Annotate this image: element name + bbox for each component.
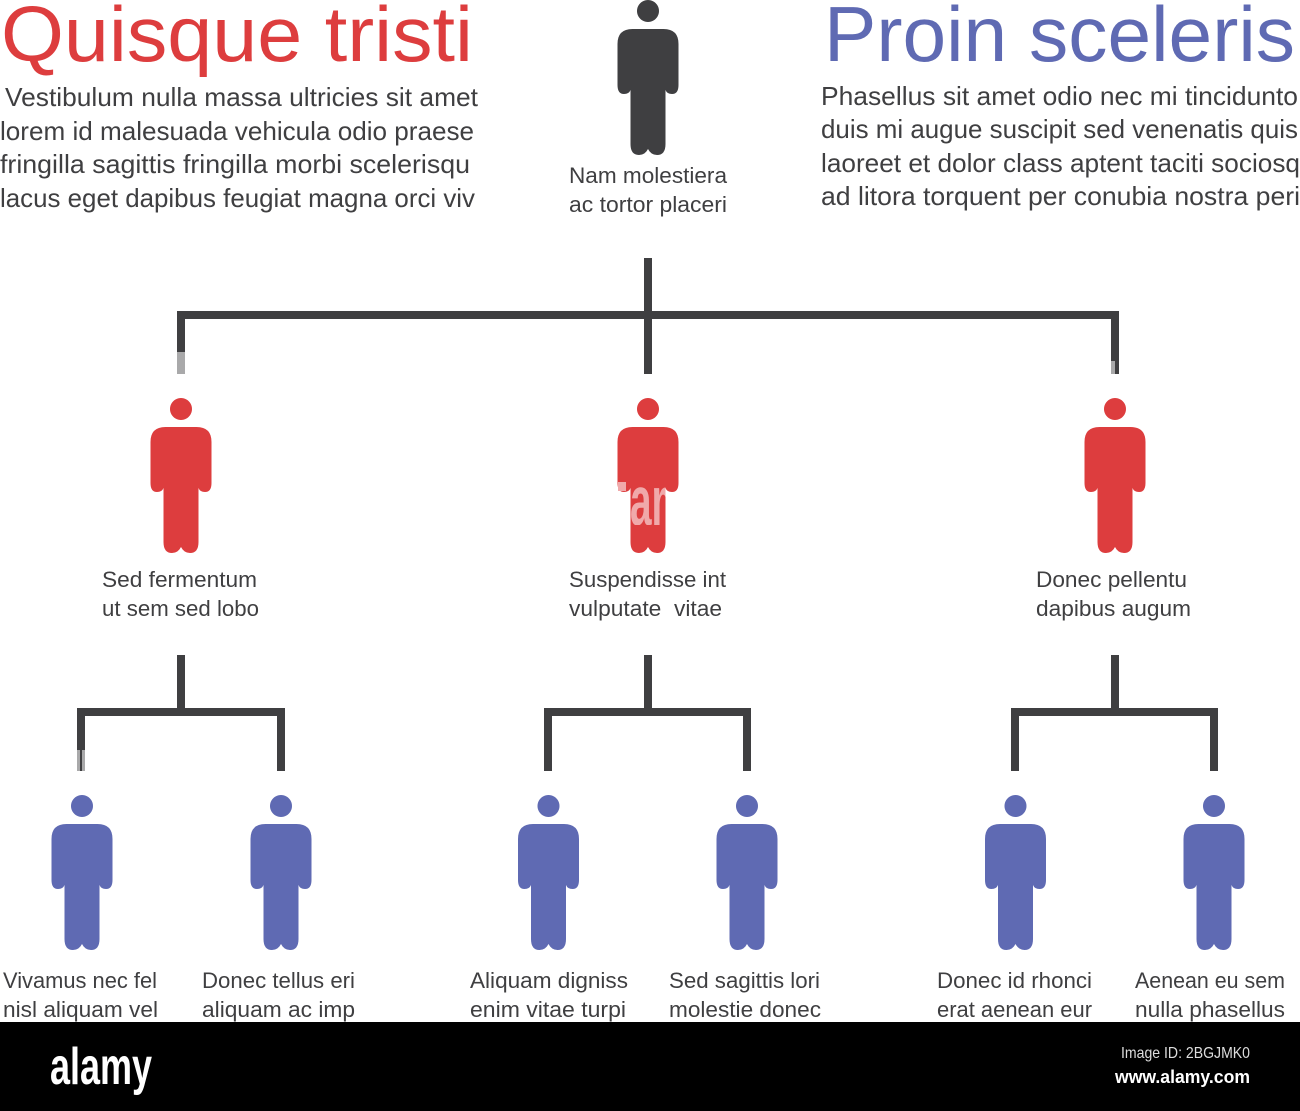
footer bar: [0, 1022, 1300, 1111]
label: blue 2: Donec tellus eri: [202, 968, 355, 993]
label: red left: ut sem sed lobo: [102, 596, 259, 621]
label: blue 4: molestie donec: [669, 997, 821, 1022]
watermark fragment on centre person: [618, 482, 666, 525]
text block: right: [821, 81, 1300, 211]
label: blue 6: [1135, 968, 1285, 1022]
text block: right: ad litora torquent per conubia nostra peri: [821, 181, 1300, 211]
label: red right: Donec pellentu: [1036, 567, 1187, 592]
connector: second branch: [548, 655, 747, 771]
label: blue 2: aliquam ac imp: [202, 997, 355, 1022]
icon: blue person 6: [1184, 795, 1244, 950]
icon: red person centre: [618, 398, 678, 553]
label: blue 5: Donec id rhonci: [937, 968, 1092, 993]
label: blue 4: Sed sagittis lori: [669, 968, 820, 993]
logo: alamy: alamy: [50, 1038, 152, 1096]
icon: blue person 2: [250, 795, 312, 950]
label: red centre: vulputate vitae: [569, 596, 722, 621]
connector: first branch: [81, 655, 281, 771]
label: blue 2: [202, 968, 355, 1022]
label: red centre: [569, 567, 726, 621]
label: blue 6: Aenean eu sem: [1135, 968, 1285, 993]
icon: red person left: [150, 398, 212, 553]
text block: right: duis mi augue suscipit sed venenatis quis: [821, 114, 1298, 144]
text block: left: lacus eget dapibus feugiat magna orci viv: [0, 183, 475, 213]
watermark fragments on connectors: [77, 352, 1115, 771]
label: red right: [1036, 567, 1191, 621]
label: blue 1: Vivamus nec fel: [3, 968, 157, 993]
text block: right: Phasellus sit amet odio nec mi tincidunto: [821, 81, 1298, 111]
label: root: Nam molestiera: [569, 163, 728, 188]
label: red left: [102, 567, 259, 621]
label: blue 6: nulla phasellus: [1135, 997, 1285, 1022]
label: red left: Sed fermentum: [102, 567, 257, 592]
text block: left: lorem id malesuada vehicula odio praese: [0, 116, 474, 146]
icon: root person: [618, 0, 678, 155]
label: root: ac tortor placeri: [569, 192, 727, 217]
label: blue 3: [470, 968, 628, 1022]
label: blue 5: [937, 968, 1092, 1022]
text block: left: [0, 82, 479, 213]
label: blue 1: [3, 968, 158, 1022]
website: www.alamy.com: [1114, 1067, 1250, 1087]
connector: third branch: [1015, 655, 1214, 771]
label: red centre: Suspendisse int: [569, 567, 726, 592]
label: blue 5: erat aenean eur: [937, 997, 1092, 1022]
connector: root to level two: [181, 258, 1115, 374]
label: root: [569, 163, 728, 217]
icon: blue person 3: [518, 795, 579, 950]
icon: blue person 1: [52, 795, 112, 950]
label: red right: dapibus augum: [1036, 596, 1191, 621]
label: blue 1: nisl aliquam vel: [3, 997, 158, 1022]
watermark fragment on centre person: am: [630, 462, 686, 540]
label: blue 3: enim vitae turpi: [470, 997, 626, 1022]
image id: Image ID: 2BGJMK0: [1121, 1045, 1250, 1062]
text block: left: fringilla sagittis fringilla morbi scelerisqu: [0, 149, 470, 179]
label: blue 3: Aliquam digniss: [470, 968, 628, 993]
label: blue 4: [669, 968, 821, 1022]
icon: blue person 5: [985, 795, 1046, 950]
text block: right: laoreet et dolor class aptent taciti sociosq: [821, 148, 1300, 178]
icon: blue person 4: [716, 795, 778, 950]
icon: red person right: [1084, 398, 1146, 553]
text block: left: Vestibulum nulla massa ultricies sit amet: [5, 82, 479, 112]
